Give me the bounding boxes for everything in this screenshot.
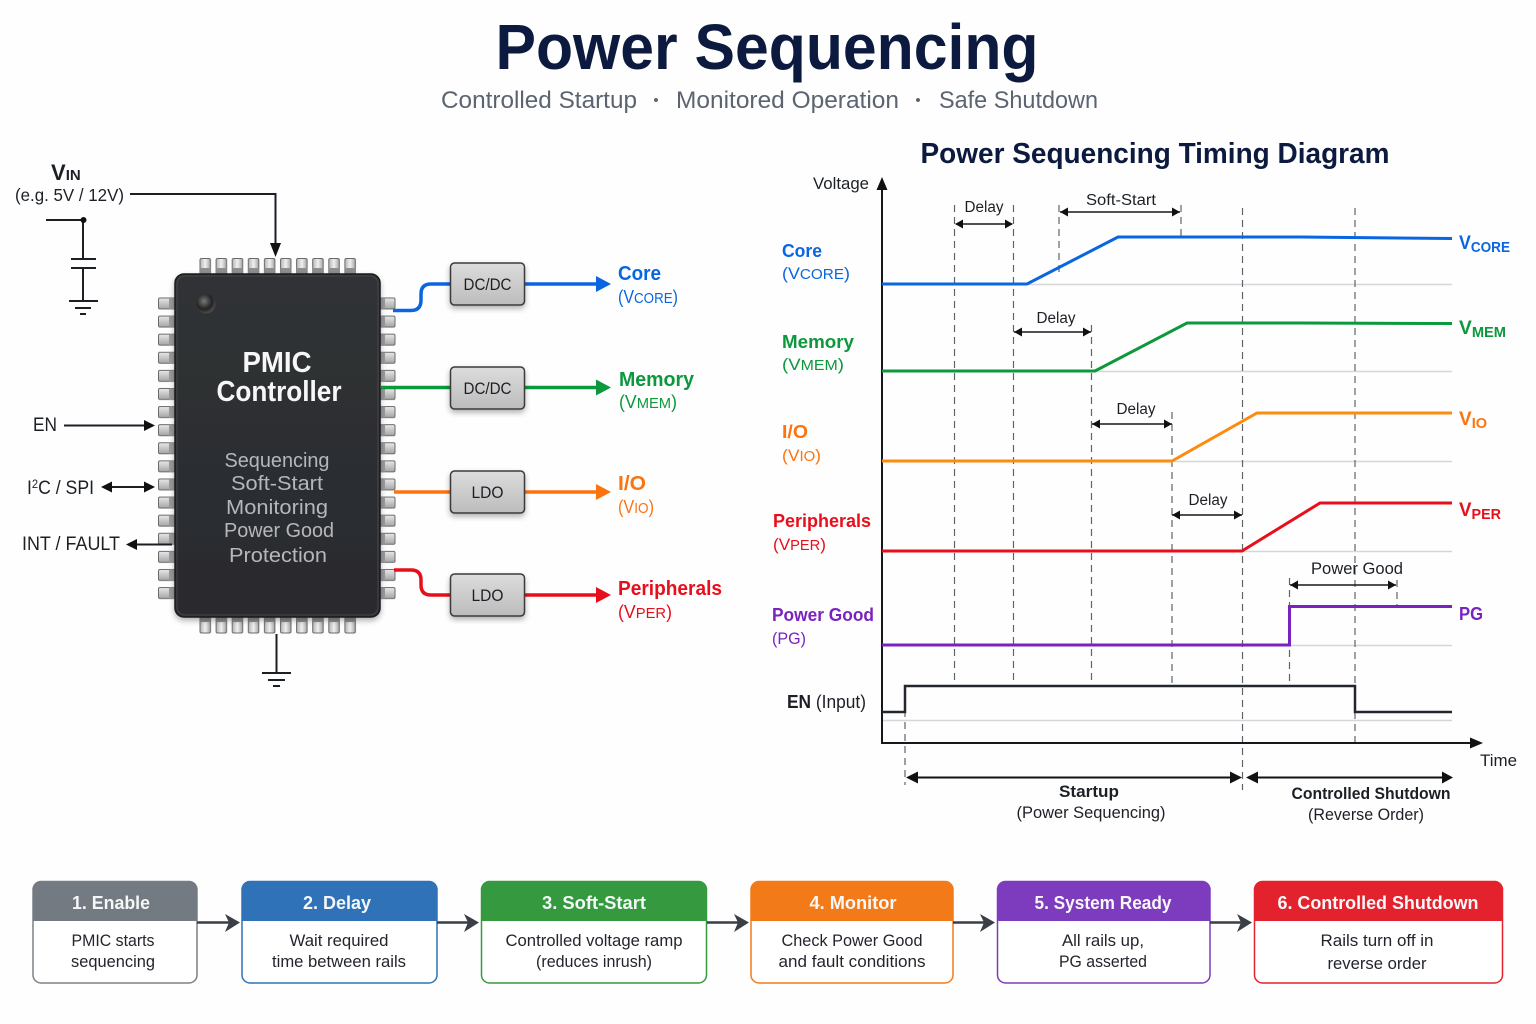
step 3: Soft-Start: Controlled voltage ramp — [506, 932, 682, 950]
trace: Power Good — [772, 603, 1483, 648]
panel: process flow — [33, 882, 1502, 983]
step 1: Enable: sequencing — [71, 953, 155, 971]
arrow — [437, 914, 479, 932]
chip functions: Power Good — [224, 519, 334, 542]
rail: Peripherals: LDO — [472, 586, 504, 605]
rail: Core — [393, 263, 678, 310]
axes: Voltage — [813, 175, 869, 193]
trace: VIO: I/O — [782, 421, 808, 442]
trace: VPER: PER — [1472, 507, 1502, 523]
trace: Power Good: PG — [1459, 603, 1483, 624]
rail: I/O — [394, 471, 654, 517]
panel: PMIC block diagram — [15, 160, 722, 686]
chip pins — [158, 258, 396, 634]
phase: Controlled Shutdown — [1246, 772, 1453, 824]
trace: VCORE: V — [1459, 233, 1472, 254]
delay 4: Delay — [1188, 492, 1228, 509]
trace: VMEM: Memory — [782, 331, 855, 352]
trace: VCORE: Core — [782, 240, 822, 261]
soft-start — [1060, 192, 1180, 216]
step 6: Controlled Shutdown: reverse order — [1328, 955, 1427, 973]
subtitle: • — [915, 92, 921, 109]
trace: Power Good: Power Good — [772, 604, 874, 625]
soft-start: Soft-Start — [1086, 192, 1157, 209]
phase: Startup: Startup — [1059, 783, 1119, 801]
arrow — [953, 914, 995, 932]
baselines — [882, 284, 1452, 720]
title: Power Sequencing — [496, 11, 1038, 83]
step 4: Monitor: and fault conditions — [778, 953, 926, 971]
subtitle: Safe Shutdown — [939, 87, 1098, 114]
step 1: Enable: 1. Enable — [72, 893, 150, 913]
EN input: EN — [33, 415, 57, 436]
rail: Peripherals — [394, 570, 722, 622]
delay 3 — [1092, 401, 1172, 428]
arrow — [1210, 914, 1252, 932]
chip title: PMIC — [242, 347, 312, 379]
panel: timing diagram — [772, 138, 1517, 824]
step 6: Controlled Shutdown — [1254, 882, 1502, 983]
phase: Controlled Shutdown: Controlled Shutdown — [1292, 785, 1450, 803]
icon: pin 1 marker — [196, 294, 216, 314]
I2C SPI bus: 2 — [32, 477, 38, 491]
trace: VMEM: V — [1459, 318, 1472, 339]
trace: VIO: (VIO) — [782, 446, 821, 465]
rail: Core: (VCORE) — [618, 287, 678, 307]
chip functions — [224, 449, 334, 567]
delay 4 — [1172, 492, 1242, 520]
icon: input capacitor and ground — [46, 217, 98, 314]
rail: Core: DC/DC — [464, 275, 512, 294]
trace: VCORE — [782, 233, 1510, 284]
axes — [813, 175, 1517, 770]
trace: VIO — [782, 409, 1487, 465]
phase: Startup: (Power Sequencing) — [1016, 804, 1166, 822]
trace: EN — [787, 686, 1452, 712]
step 1: Enable: PMIC starts — [72, 932, 154, 950]
INT FAULT output — [22, 534, 172, 555]
INT FAULT output: INT / FAULT — [22, 534, 120, 555]
chip functions: Monitoring — [226, 496, 328, 519]
rail: I/O: LDO — [472, 483, 504, 502]
step 2: Delay: time between rails — [272, 953, 406, 971]
rail: Memory: DC/DC — [464, 379, 512, 398]
trace: VIO: V — [1459, 409, 1472, 430]
step 5: System Ready: All rails up, — [1062, 932, 1144, 950]
phase: Controlled Shutdown: (Reverse Order) — [1308, 806, 1424, 824]
axes: Time — [1480, 752, 1517, 770]
trace: VCORE: CORE — [1471, 240, 1510, 256]
trace: VPER — [773, 500, 1502, 554]
rail: Peripherals: (VPER) — [618, 602, 672, 622]
I2C SPI bus — [27, 477, 155, 499]
power good interval — [1290, 560, 1403, 590]
step 5: System Ready: PG asserted — [1059, 953, 1147, 971]
VIN label — [15, 160, 124, 205]
trace: Power Good: (PG) — [772, 629, 806, 648]
chip functions: Protection — [229, 544, 327, 567]
delay 2 — [1014, 310, 1091, 336]
step 2: Delay: Wait required — [290, 932, 388, 950]
delay 1 — [955, 199, 1013, 228]
chip title — [216, 347, 342, 408]
subtitle — [441, 87, 1098, 114]
trace: VMEM — [782, 318, 1506, 374]
PMIC chip — [175, 274, 380, 617]
subtitle: Controlled Startup — [441, 87, 637, 114]
step 4: Monitor: 4. Monitor — [810, 893, 896, 913]
arrow — [197, 914, 240, 932]
trace: EN: EN (Input) — [787, 692, 866, 712]
I2C SPI bus: C / SPI — [38, 478, 94, 499]
step 2: Delay: 2. Delay — [303, 893, 371, 913]
trace: VPER: (VPER) — [773, 535, 826, 554]
I2C SPI bus: I — [27, 478, 32, 499]
timing diagram heading: Power Sequencing Timing Diagram — [920, 138, 1390, 170]
chip functions: Soft-Start — [231, 472, 323, 495]
trace: VIO: IO — [1472, 416, 1487, 432]
subtitle: • — [653, 92, 659, 109]
step 4: Monitor: Check Power Good — [782, 932, 922, 950]
control signals — [22, 415, 172, 555]
step 2: Delay — [242, 882, 437, 983]
arrow — [707, 914, 749, 932]
delay 1: Delay — [964, 199, 1004, 216]
trace: VPER: V — [1459, 500, 1472, 521]
rail: Memory: Memory — [619, 369, 695, 391]
step 3: Soft-Start: (reduces inrush) — [536, 953, 652, 971]
trace: VMEM: MEM — [1472, 325, 1506, 341]
rail: Memory — [381, 367, 695, 412]
trace: VMEM: (VMEM) — [782, 355, 844, 374]
rail: Core: Core — [618, 263, 661, 285]
step 1: Enable — [33, 882, 197, 983]
rail: I/O: I/O — [618, 473, 646, 495]
chip title: Controller — [216, 376, 342, 408]
arrow: VIN to chip — [130, 194, 281, 257]
power good interval: Power Good — [1311, 560, 1403, 578]
trace: VCORE: (VCORE) — [782, 264, 850, 283]
subtitle: Monitored Operation — [676, 87, 899, 114]
step 5: System Ready: 5. System Ready — [1034, 893, 1172, 913]
chip functions: Sequencing — [224, 449, 330, 472]
step 6: Controlled Shutdown: 6. Controlled Shutdown — [1278, 893, 1478, 913]
step 4: Monitor — [751, 882, 953, 983]
EN input — [33, 415, 155, 436]
ground symbol — [262, 634, 291, 686]
VIN label: (e.g. 5V / 12V) — [15, 185, 124, 205]
interval labels — [955, 192, 1403, 590]
step 3: Soft-Start — [482, 882, 706, 983]
rail: Peripherals: Peripherals — [618, 578, 722, 600]
delay 3: Delay — [1116, 401, 1156, 418]
VIN label: VIN — [51, 160, 81, 185]
step 3: Soft-Start: 3. Soft-Start — [542, 893, 646, 913]
phase: Startup — [906, 772, 1242, 822]
step 5: System Ready — [998, 882, 1210, 983]
rail: I/O: (VIO) — [618, 497, 654, 517]
delay 2: Delay — [1036, 310, 1076, 327]
timing markers — [905, 205, 1397, 790]
trace: VPER: Peripherals — [773, 510, 871, 531]
rail: Memory: (VMEM) — [619, 392, 677, 412]
step 6: Controlled Shutdown: Rails turn off in — [1320, 932, 1434, 950]
